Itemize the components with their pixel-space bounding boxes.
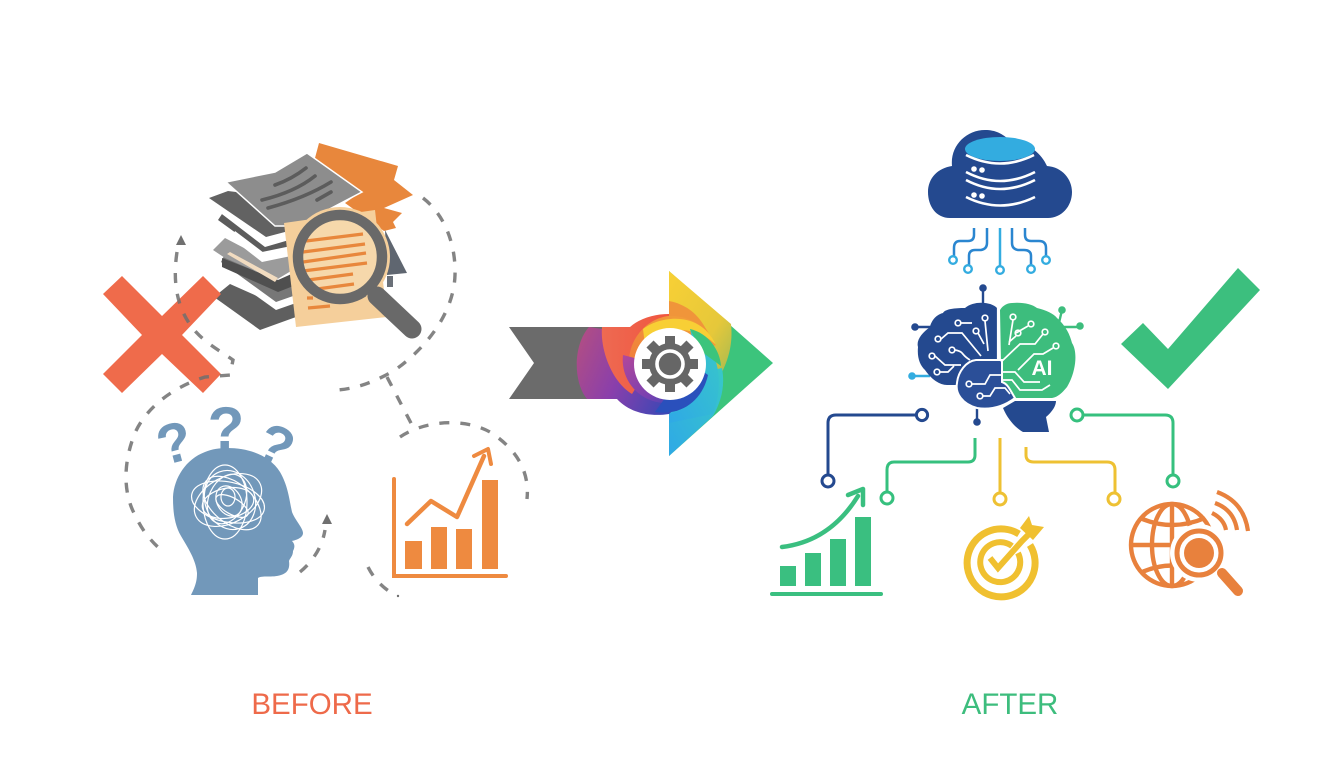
- connector: yellow to target: [994, 438, 1006, 505]
- icon: document stack: [209, 153, 407, 330]
- connector: green to chart: [881, 438, 975, 504]
- process arrow with gear: [509, 271, 773, 456]
- icon: green check mark: [1121, 268, 1260, 389]
- icon: AI brain: [908, 284, 1084, 432]
- icon: gear: [642, 336, 698, 392]
- panel: before: [103, 143, 527, 721]
- connector: green to globe: [1071, 409, 1179, 487]
- icon: confused head: ?: [208, 395, 244, 462]
- icon: globe with magnifier and signal: [1130, 492, 1248, 591]
- circuit lines from cloud: [949, 228, 1050, 274]
- icon: confused head: ?: [247, 410, 305, 481]
- panel: after: [772, 130, 1260, 721]
- icon: orange bar chart: [394, 449, 506, 576]
- icon: green rising bar chart: [772, 489, 881, 594]
- icon: confused head: [150, 395, 305, 595]
- icon: cloud database: [928, 130, 1072, 218]
- icon: red cross: [103, 276, 221, 393]
- icon: highlighted page with magnifying glass: [284, 207, 412, 329]
- dashed loop arrows: [126, 198, 527, 597]
- icon: target with check arrow: [967, 516, 1044, 597]
- icon: confused head: ?: [150, 408, 199, 477]
- connector: blue to green chart: [822, 409, 928, 487]
- icon: AI brain: AI: [1032, 357, 1052, 380]
- icon: orange loose papers: [315, 143, 413, 231]
- label: after: AFTER: [962, 688, 1058, 721]
- label: before: BEFORE: [251, 688, 373, 721]
- connector: yellow right: [1026, 447, 1120, 505]
